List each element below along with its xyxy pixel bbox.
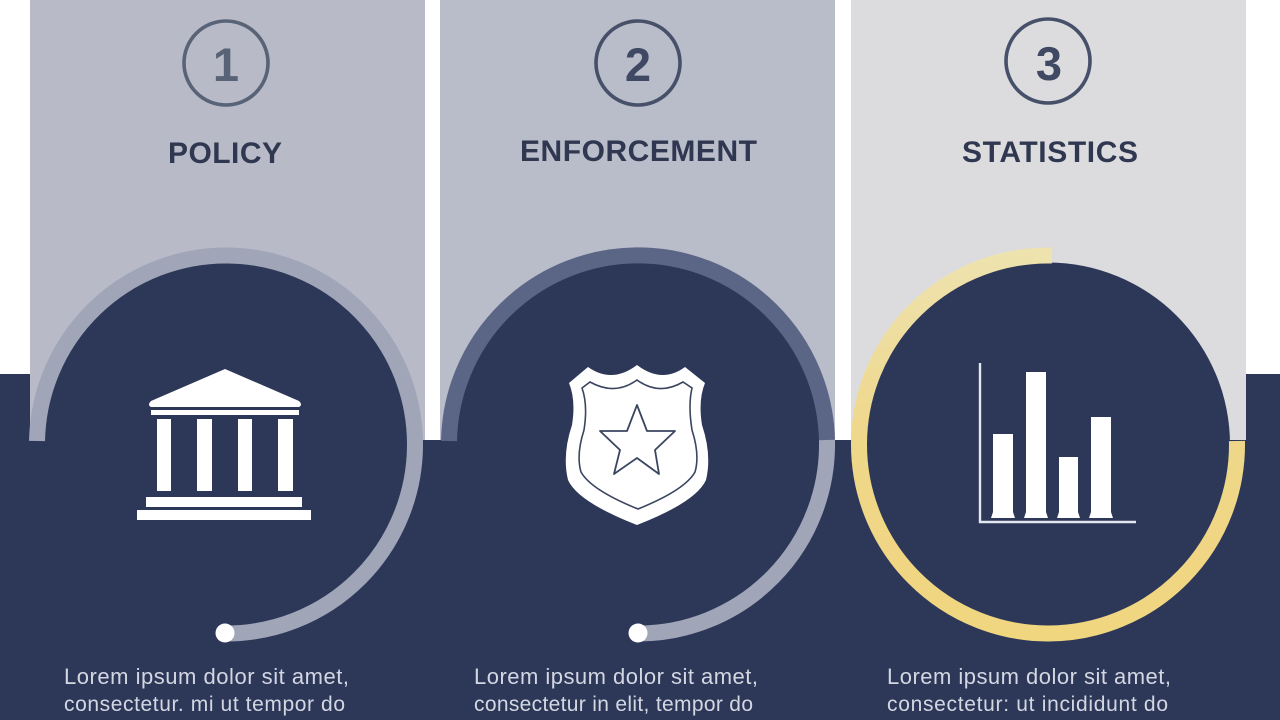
ring end dot 2: [628, 624, 648, 642]
number badge 1: [184, 21, 268, 105]
ring end dot 1: [216, 624, 234, 642]
navy background band: [0, 374, 1280, 720]
circle 2 with progress ring: [449, 255, 827, 642]
number badge 2: 2: [625, 38, 651, 91]
text block: statistics description: consectetur: ut incididunt do: [887, 693, 1168, 716]
text block: policy description: Lorem ipsum dolor sit amet,: [64, 664, 349, 689]
icon: government building: [137, 369, 311, 520]
number badge 3: [1006, 19, 1090, 103]
heading: policy: POLICY: [168, 137, 282, 170]
text block: statistics description: Lorem ipsum dolor sit amet,: [887, 664, 1171, 689]
text block: enforcement description: consectetur in elit, tempor do: [474, 693, 753, 716]
circle 1 with progress ring: [37, 255, 415, 643]
heading: statistics: STATISTICS: [962, 136, 1138, 169]
number badge 2: [596, 21, 680, 105]
number badge 3: 3: [1036, 37, 1062, 90]
number badge 1: 1: [213, 38, 239, 91]
icon: police shield with star: [566, 365, 708, 525]
heading: enforcement: ENFORCEMENT: [520, 135, 757, 168]
text block: statistics description: [887, 664, 1171, 716]
panel: statistics: [851, 0, 1246, 440]
text block: enforcement description: Lorem ipsum dolor sit amet,: [474, 664, 758, 689]
panel: policy: [30, 0, 425, 440]
text block: enforcement description: [474, 664, 758, 716]
icon: bar chart: [980, 363, 1136, 522]
text block: policy description: [64, 664, 349, 716]
panel: enforcement: [440, 0, 835, 440]
text block: policy description: consectetur. mi ut tempor do: [64, 693, 345, 716]
circle 3 with gold ring: [859, 255, 1237, 633]
